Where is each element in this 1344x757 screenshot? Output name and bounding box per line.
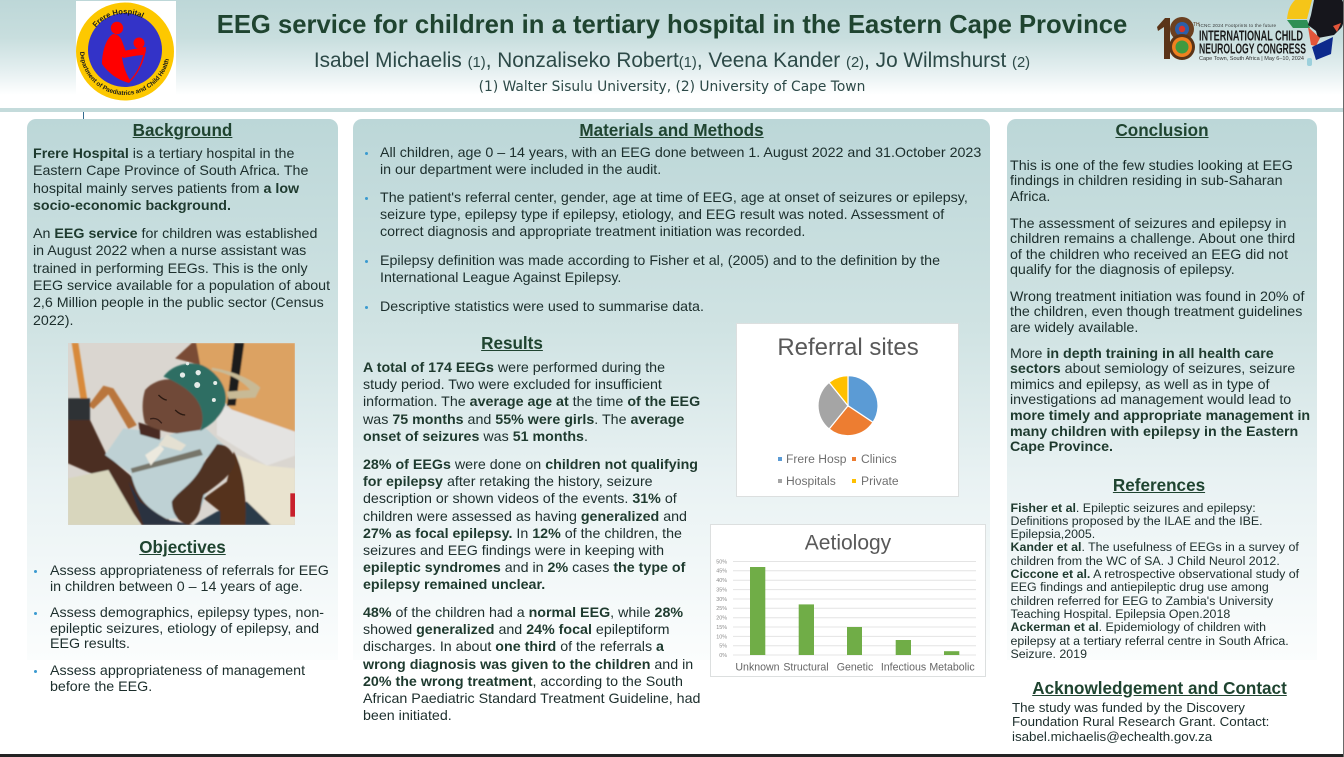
- text: references list: Ciccone et al. A retrospective observational study of: [1010, 567, 1299, 581]
- text: EEG results and treatment: [363, 605, 700, 724]
- text: conclusion paragraph 4: Cape Province.: [1010, 439, 1113, 455]
- text: results summary: study period. Two were excluded for insufficient: [363, 377, 662, 393]
- bar chart: aetiology: Unknown: [735, 662, 780, 674]
- list: objectives: Assess demographics, epilepsy types, non-: [50, 605, 324, 621]
- bar chart: aetiology: 25%: [716, 606, 727, 612]
- list: objectives: [34, 563, 329, 694]
- text: conclusion paragraph 2: of the children who received an EEG did not: [1010, 247, 1288, 263]
- text: references list: Definitions proposed by the ILAE and the IBE.: [1010, 514, 1263, 528]
- text: references list: children referred for EEG to Zambia's University: [1010, 594, 1273, 608]
- list: methods: Epilepsy definition was made according to Fisher et al, (2005) and to the definition by the: [380, 252, 940, 268]
- heading: background: Background: [133, 121, 232, 140]
- list: objectives: in children between 0 – 14 years of age.: [50, 578, 303, 594]
- text: results summary: A total of 174 EEGs were performed during the: [363, 360, 665, 376]
- congress logo: Cape Town, South Africa | May 6–10, 2024: [1199, 56, 1304, 62]
- text: references list: epilepsy at a tertiary referral centre in South Africa.: [1010, 634, 1289, 648]
- panel: background and objectives: before the EEG.: [50, 678, 152, 694]
- list: objectives: epileptic seizures, etiology of epilepsy, and: [50, 620, 319, 636]
- heading: objectives: Objectives: [139, 538, 226, 557]
- text: results summary: [363, 360, 700, 445]
- bar chart: aetiology: Aetiology: [805, 532, 892, 554]
- text: EEG service description: EEG service available for a population of about: [33, 278, 330, 294]
- pie chart: referral sites: Hospitals: [786, 474, 836, 488]
- authors: Isabel Michaelis (1), Nonzaliseko Robert(1), Veena Kander (2), Jo Wilmshurst (2): [314, 49, 1030, 72]
- text: references list: Epilepsia,2005.: [1010, 527, 1095, 541]
- text: EEG results and treatment: 48% of the children had a normal EEG, while 28%: [363, 605, 683, 621]
- pie chart: referral sites: Clinics: [861, 452, 897, 466]
- text: acknowledgement and contact: The study was funded by the Discovery: [1012, 700, 1245, 715]
- text: conclusion paragraph 3: the children, even though treatment guidelines: [1010, 304, 1302, 320]
- list: methods: correct diagnosis and appropriate treatment initiation was recorded.: [380, 224, 805, 240]
- text: EEG results and treatment: discharges. In about one third of the referrals a: [363, 639, 664, 655]
- small tick mark: [83, 112, 84, 119]
- text: epilepsy findings: children were assessed as having generalized and: [363, 508, 687, 524]
- text: EEG service description: An EEG service for children was established: [33, 226, 317, 242]
- text: hospital description: Frere Hospital is a tertiary hospital in the: [33, 146, 294, 162]
- text: epilepsy findings: epileptic syndromes and in 2% cases the type of: [363, 560, 685, 576]
- bottom edge line: [0, 754, 1344, 757]
- bar chart: aetiology: 45%: [716, 569, 727, 575]
- list: methods: Descriptive statistics were used to summarise data.: [380, 298, 704, 314]
- panel: materials, methods and results: [353, 119, 990, 729]
- text: references list: Ackerman et al. Epidemiology of children with: [1010, 620, 1266, 634]
- pie chart: referral sites: Referral sites: [777, 334, 919, 361]
- text: references list: EEG findings and antiepileptic drug use among: [1010, 580, 1269, 594]
- text: acknowledgement and contact: Foundation Rural Research Grant. Contact:: [1012, 714, 1269, 729]
- heading: acknowledgement and contact: Acknowledgement and Contact: [1032, 679, 1287, 698]
- affiliations: (1) Walter Sisulu University, (2) University of Cape Town: [479, 79, 865, 95]
- text: references list: Seizure. 2019: [1010, 647, 1087, 661]
- text: acknowledgement and contact: isabel.michaelis@echealth.gov.za: [1012, 729, 1212, 744]
- text: conclusion paragraph 4: investigations ad management would lead to: [1010, 392, 1291, 408]
- text: conclusion paragraph 4: More in depth training in all health care: [1010, 346, 1274, 362]
- bar chart: aetiology: Structural: [783, 662, 829, 674]
- congress logo: ICNC 2024 Footprints to the future: [1199, 23, 1276, 28]
- text: EEG results and treatment: showed generalized and 24% focal epileptiform: [363, 622, 670, 638]
- text: references list: Teaching Hospital. Epilepsia Open.2018: [1010, 607, 1230, 621]
- text: references list: children from the WC of SA. J Child Neurol 2012.: [1010, 554, 1280, 568]
- pie chart: referral sites: Frere Hosp: [786, 452, 847, 466]
- text: results summary: onset of seizures was 51 months.: [363, 429, 588, 445]
- bar chart: aetiology: 30%: [716, 597, 727, 603]
- heading: results: Results: [481, 334, 543, 353]
- text: conclusion paragraph 1: findings in children residing in sub-Saharan: [1010, 173, 1282, 189]
- bar chart: aetiology: Genetic: [837, 662, 874, 674]
- title: EEG service for children in a tertiary hospital in the Eastern Cape Province: [217, 11, 1127, 39]
- photo: child wearing EEG cap: [68, 343, 295, 525]
- pie chart: referral sites: [736, 323, 959, 497]
- text: conclusion paragraph 2: qualify for the diagnosis of epilepsy.: [1010, 262, 1235, 278]
- text: references list: Kander et al. The usefulness of EEGs in a survey of: [1010, 540, 1299, 554]
- text: EEG results and treatment: African Paediatric Standard Treatment Guideline, had: [363, 691, 700, 707]
- text: EEG service description: in August 2022 when a nurse assistant was: [33, 243, 306, 259]
- text: references list: [1010, 500, 1300, 661]
- text: conclusion paragraph 1: [1010, 158, 1293, 205]
- text: conclusion paragraph 4: many children with epilepsy in the Eastern: [1010, 424, 1298, 440]
- bar chart: aetiology: Metabolic: [929, 662, 975, 674]
- list: methods: [365, 144, 981, 314]
- text: EEG service description: trained in performing EEGs. This is the only: [33, 261, 308, 277]
- list: objectives: EEG results.: [50, 636, 130, 652]
- text: conclusion paragraph 3: are widely available.: [1010, 320, 1138, 336]
- list: methods: The patient's referral center, gender, age at time of EEG, age at onset of seizures or epilepsy,: [380, 190, 968, 206]
- hospital logo: Frere Hospital: [92, 9, 144, 28]
- text: conclusion paragraph 4: [1010, 346, 1310, 455]
- list: methods: in our department were included in the audit.: [380, 162, 661, 178]
- text: epilepsy findings: seizures and EEG findings were in keeping with: [363, 543, 664, 559]
- bar chart: aetiology: 5%: [719, 644, 727, 650]
- heading: conclusion: Conclusion: [1115, 121, 1209, 140]
- text: conclusion paragraph 4: sectors about semiology of seizures, seizure: [1010, 361, 1295, 377]
- text: conclusion paragraph 2: The assessment of seizures and epilepsy in: [1010, 216, 1286, 232]
- bar chart: aetiology: 40%: [716, 578, 727, 584]
- panel: conclusion, references and acknowledgement: [1007, 119, 1317, 751]
- heading: references: References: [1113, 476, 1205, 494]
- list: methods: All children, age 0 – 14 years, with an EEG done between 1. August 2022 and 31.October 2023: [380, 144, 981, 160]
- text: epilepsy findings: for epilepsy after retaking the history, seizure: [363, 474, 653, 490]
- text: hospital description: socio-economic background.: [33, 198, 231, 214]
- heading: materials and methods: Materials and Methods: [579, 121, 764, 140]
- text: EEG service description: 2,6 Million people in the public sector (Census: [33, 295, 324, 311]
- bar chart: aetiology: 10%: [716, 634, 727, 640]
- pie chart: referral sites: Private: [861, 474, 899, 488]
- text: EEG results and treatment: been initiated.: [363, 708, 452, 724]
- bar chart: aetiology: 20%: [716, 616, 727, 622]
- text: conclusion paragraph 1: This is one of the few studies looking at EEG: [1010, 158, 1293, 174]
- text: EEG results and treatment: 20% the wrong treatment, according to the South: [363, 674, 683, 690]
- text: EEG service description: 2022).: [33, 313, 73, 329]
- text: conclusion paragraph 4: more timely and appropriate management in: [1010, 408, 1310, 424]
- list: methods: International League Against Epilepsy.: [380, 270, 621, 286]
- text: conclusion paragraph 2: [1010, 216, 1295, 278]
- text: epilepsy findings: epilepsy remained unclear.: [363, 577, 545, 593]
- text: conclusion paragraph 4: mimics and epilepsy, as well as in type of: [1010, 377, 1270, 393]
- text: results summary: was 75 months and 55% were girls. The average: [363, 412, 684, 428]
- header band: [0, 0, 1344, 112]
- text: references list: Fisher et al. Epileptic seizures and epilepsy:: [1010, 500, 1256, 514]
- text: epilepsy findings: [363, 457, 698, 593]
- text: conclusion paragraph 1: Africa.: [1010, 189, 1050, 205]
- bar chart: aetiology: 15%: [716, 625, 727, 631]
- text: conclusion paragraph 2: children remains a challenge. About one third: [1010, 231, 1295, 247]
- text: EEG results and treatment: wrong diagnosis was given to the children and in: [363, 656, 693, 672]
- list: objectives: Assess appropriateness of management: [50, 663, 305, 679]
- hospital logo: [76, 1, 176, 100]
- bar chart: aetiology: [710, 524, 986, 677]
- congress logo: TH: [1193, 22, 1200, 28]
- panel: background and objectives: [27, 119, 338, 699]
- bar chart: aetiology: 50%: [716, 559, 727, 565]
- text: conclusion paragraph 3: Wrong treatment initiation was found in 20% of: [1010, 289, 1304, 305]
- bar chart: aetiology: 0%: [719, 653, 727, 659]
- text: epilepsy findings: 27% as focal epilepsy. In 12% of the children, the: [363, 526, 682, 542]
- bar chart: aetiology: 35%: [716, 587, 727, 593]
- right edge line: [1343, 0, 1344, 757]
- text: hospital description: [33, 146, 308, 214]
- text: hospital description: Eastern Cape Province of South Africa. The: [33, 163, 308, 179]
- text: conclusion paragraph 3: [1010, 289, 1304, 336]
- bar chart: aetiology: Infectious: [881, 662, 926, 674]
- hospital logo: Department of Paediatrics and Child Health: [80, 52, 169, 95]
- text: acknowledgement and contact: [1012, 700, 1269, 744]
- text: results summary: information. The average age at the time of the EEG: [363, 394, 700, 410]
- text: epilepsy findings: 28% of EEGs were done on children not qualifying: [363, 457, 698, 473]
- list: objectives: Assess appropriateness of referrals for EEG: [50, 563, 329, 579]
- list: methods: seizure type, epilepsy type if epilepsy, etiology, and EEG result was noted. Assessment of: [380, 207, 944, 223]
- text: EEG service description: [33, 226, 330, 329]
- congress logo: [1157, 0, 1343, 66]
- text: hospital description: hospital mainly serves patients from a low: [33, 181, 299, 197]
- text: epilepsy findings: description or shown videos of the events. 31% of: [363, 491, 677, 507]
